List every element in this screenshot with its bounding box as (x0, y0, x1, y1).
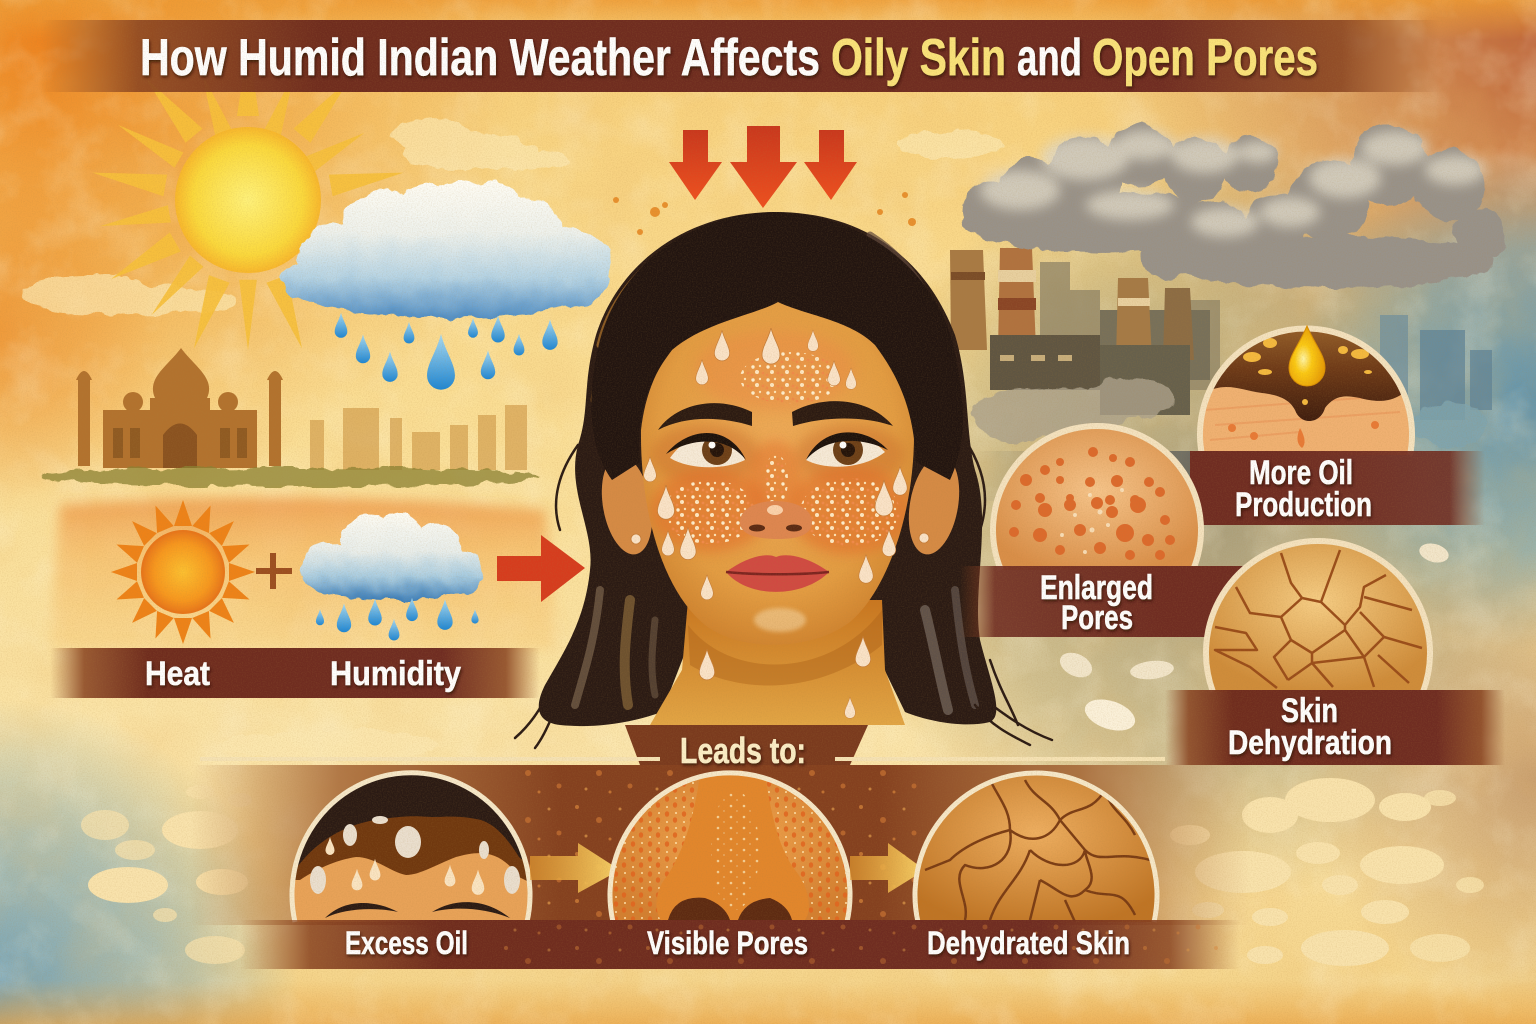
label: Pores (1061, 599, 1133, 637)
banner (960, 566, 1250, 637)
label: visible pores: Visible Pores (647, 925, 808, 961)
arrow: heat and humidity to face (497, 535, 585, 602)
title: Oily Skin (831, 29, 1006, 87)
icon: Taj Mahal (76, 348, 283, 468)
background clouds, left and top (20, 119, 1005, 760)
lips (726, 555, 829, 592)
result: excess oil circle (290, 770, 535, 922)
title: Open Pores (1092, 29, 1318, 87)
face shape (641, 300, 914, 645)
panel: skin dehydration (1165, 541, 1505, 765)
skin pores (650, 330, 912, 632)
label: Skin (1281, 692, 1338, 730)
hair highlights (575, 232, 975, 710)
smoke clouds (962, 123, 1506, 447)
icon: small cloud with rain (humidity) (302, 513, 483, 640)
title banner (40, 20, 1440, 92)
stray hair strands (515, 440, 1052, 748)
left ear (595, 452, 659, 558)
sweat drops (631, 328, 929, 718)
wide band behind the results (190, 765, 1250, 925)
label: dehydrated skin: Dehydrated Skin (927, 925, 1130, 961)
right eye (806, 432, 888, 467)
red down arrows (669, 126, 857, 208)
result: dehydrated skin circle (915, 773, 1157, 922)
title: How Humid Indian Weather Affects (140, 29, 820, 87)
wide band behind the results (1165, 690, 1505, 765)
oil drop (1289, 326, 1325, 386)
plus sign (256, 553, 292, 589)
left eye (666, 433, 746, 467)
heading: leads to: Leads to: (680, 730, 806, 771)
arrow: oil to pores (530, 843, 620, 893)
banner: heat and humidity (50, 648, 540, 698)
label: More Oil (1249, 454, 1353, 492)
label: excess oil: Excess Oil (345, 925, 468, 961)
label: heat: Heat (145, 655, 210, 693)
pores circle (993, 426, 1201, 570)
label: humidity: Humidity (330, 655, 461, 693)
neck (650, 600, 905, 725)
small droplets around the head (613, 192, 916, 235)
hair front locks (591, 212, 778, 480)
banner (1190, 451, 1485, 525)
nose (740, 501, 812, 539)
icon: rain cloud (280, 180, 610, 390)
icon: large sun (90, 42, 406, 352)
skyline left (310, 405, 527, 470)
arrow: pores to dehydration (850, 843, 925, 893)
factories and skyline right (950, 248, 1492, 420)
cracked skin circle (1206, 541, 1430, 692)
heat panel backdrop (50, 498, 558, 650)
label: Dehydration (1228, 724, 1392, 762)
woman's face illustration (515, 212, 1052, 748)
icon: small sun (heat) (111, 500, 255, 644)
label: Enlarged (1040, 569, 1153, 607)
heading: leads to (200, 725, 1165, 771)
oil skin circle (1195, 325, 1420, 460)
result: visible pores circle (610, 773, 850, 925)
eyebrows (658, 401, 893, 430)
title: and (1017, 29, 1082, 87)
panel: more oil production (1190, 325, 1485, 525)
panel: enlarged pores (960, 426, 1250, 637)
pebbles and droplets, bottom and right (81, 540, 1484, 966)
banner: results labels (240, 920, 1240, 969)
hair back (539, 212, 996, 726)
ground strip (40, 467, 540, 487)
label: Production (1235, 486, 1372, 524)
slate band behind enlarged pores (975, 451, 1205, 501)
right ear (902, 452, 966, 558)
